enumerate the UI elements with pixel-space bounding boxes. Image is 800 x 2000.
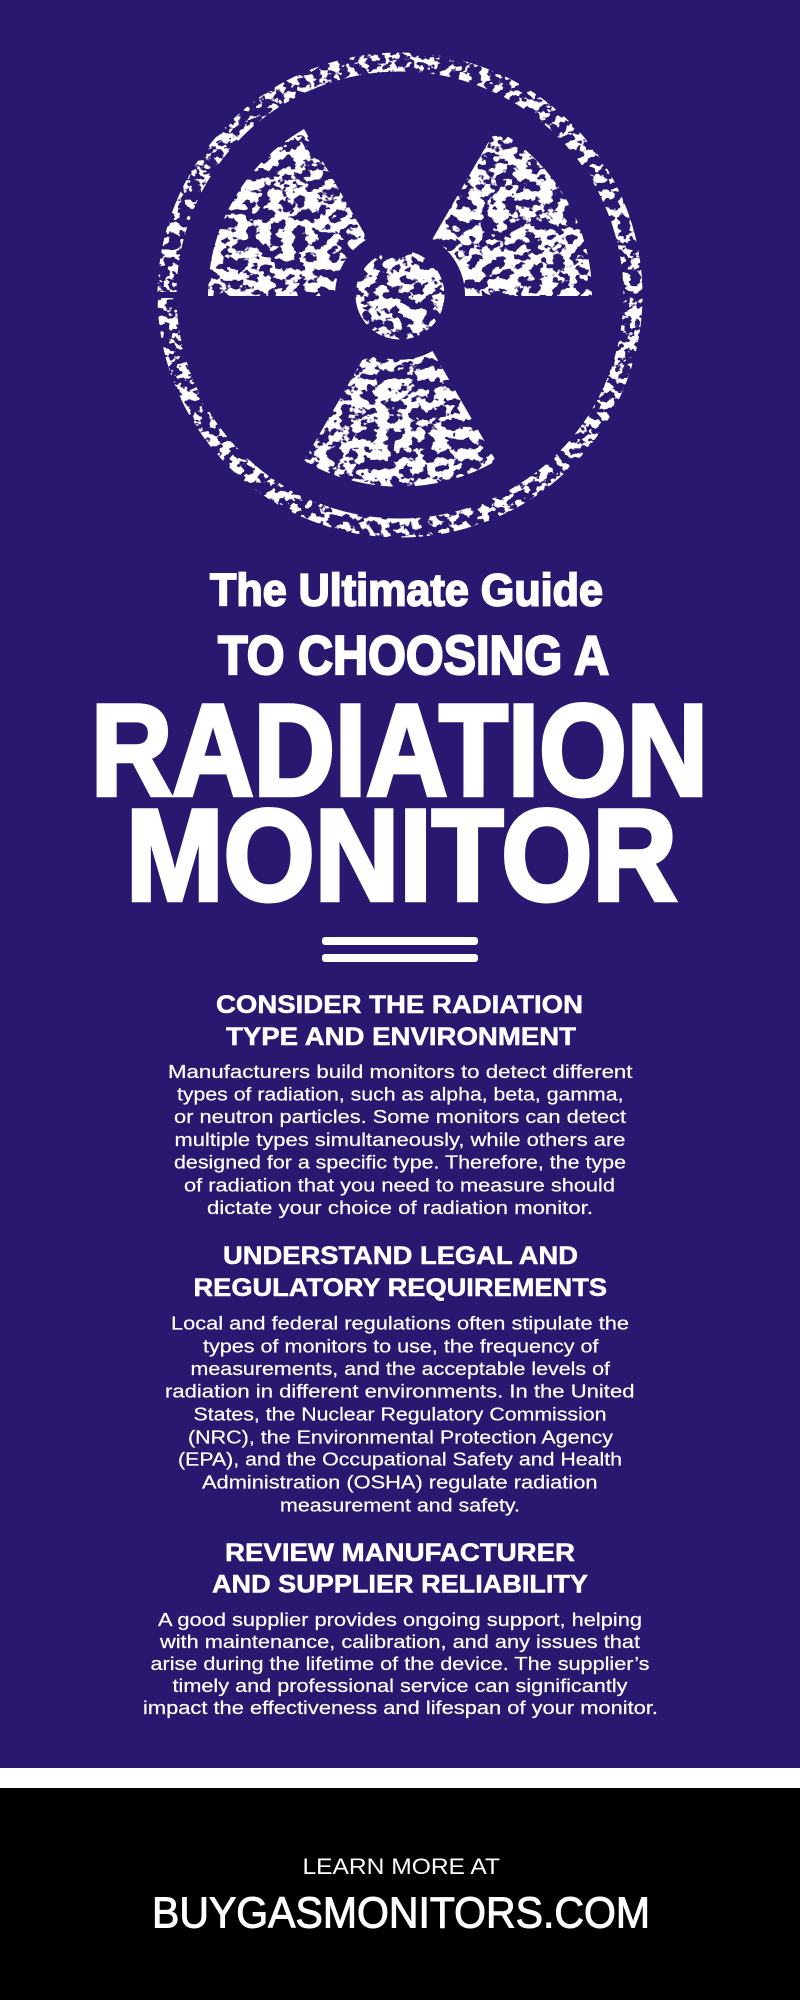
body text: supplier reliability: timely and professional service can significantly <box>172 1676 628 1696</box>
body text: radiation type: designed for a specific type. Therefore, the type <box>174 1153 626 1173</box>
body text: radiation type: Manufacturers build monitors to detect different <box>168 1062 632 1082</box>
title <box>91 564 708 928</box>
icon: outer ring <box>167 62 633 528</box>
heading: legal and regulatory: REGULATORY REQUIREMENTS <box>194 1274 607 1302</box>
footer panel <box>0 1788 800 2000</box>
body text: legal requirements: Administration (OSHA) regulate radiation <box>202 1473 598 1493</box>
body text: radiation type: of radiation that you need to measure should <box>184 1176 615 1196</box>
icon: trefoil blades and centre <box>208 129 592 487</box>
footer text: learn more at: LEARN MORE AT <box>302 1854 500 1879</box>
body text: legal requirements: Local and federal regulations often stipulate the <box>171 1314 629 1334</box>
icon: bottom blade <box>304 351 496 487</box>
title line: Radiation: RADIATION <box>91 677 708 823</box>
section: supplier reliability <box>143 1539 658 1718</box>
body text: legal requirements: measurement and safety. <box>280 1496 520 1516</box>
heading: consider the radiation type <box>216 991 583 1051</box>
icon: distressed radiation symbol <box>156 62 633 528</box>
heading: manufacturer and supplier reliability: REVIEW MANUFACTURER <box>225 1539 575 1567</box>
heading: consider the radiation type: TYPE AND ENVIRONMENT <box>226 1023 576 1051</box>
body text: supplier reliability: with maintenance, calibration, and any issues that <box>159 1632 640 1652</box>
body text: radiation type: multiple types simultaneously, while others are <box>174 1130 626 1150</box>
body text: supplier reliability <box>143 1610 658 1718</box>
body text: radiation type: dictate your choice of radiation monitor. <box>207 1198 593 1218</box>
icon: right blade <box>432 129 592 296</box>
title line: The Ultimate Guide: The Ultimate Guide <box>210 564 603 616</box>
white separator band <box>0 1768 800 1788</box>
body text: legal requirements: measurements, and the acceptable levels of <box>190 1359 611 1379</box>
footer text: website: BUYGASMONITORS.COM <box>152 1888 650 1938</box>
body text: legal requirements: States, the Nuclear Regulatory Commission <box>194 1405 606 1425</box>
body text: legal requirements: radiation in different environments. In the United <box>165 1382 634 1402</box>
title line: To Choosing A: TO CHOOSING A <box>218 625 609 686</box>
body text: legal requirements: (EPA), and the Occupational Safety and Health <box>178 1450 622 1470</box>
section: legal requirements <box>165 1242 634 1516</box>
body text: legal requirements <box>165 1314 634 1516</box>
icon: left blade <box>208 129 368 296</box>
heading: consider the radiation type: CONSIDER THE RADIATION <box>216 991 583 1019</box>
double line divider <box>322 937 478 962</box>
heading: manufacturer and supplier reliability <box>212 1539 588 1599</box>
body text: supplier reliability: arise during the lifetime of the device. The supplier’s <box>150 1654 650 1674</box>
body text: radiation type <box>168 1062 632 1218</box>
body text: radiation type: types of radiation, such as alpha, beta, gamma, <box>177 1084 624 1104</box>
heading: manufacturer and supplier reliability: AND SUPPLIER RELIABILITY <box>212 1571 588 1599</box>
heading: legal and regulatory: UNDERSTAND LEGAL AND <box>223 1242 578 1270</box>
body text: legal requirements: types of monitors to use, the frequency of <box>203 1336 600 1356</box>
body text: supplier reliability: A good supplier provides ongoing support, helping <box>158 1610 642 1630</box>
heading: legal and regulatory <box>194 1242 607 1302</box>
body text: legal requirements: (NRC), the Environmental Protection Agency <box>188 1428 613 1448</box>
section: radiation type <box>168 991 632 1218</box>
body text: radiation type: or neutron particles. Some monitors can detect <box>174 1107 626 1127</box>
body text: supplier reliability: impact the effectiveness and lifespan of your monitor. <box>143 1698 658 1718</box>
icon: centre circle <box>356 250 444 340</box>
title line: Monitor: MONITOR <box>126 782 677 928</box>
